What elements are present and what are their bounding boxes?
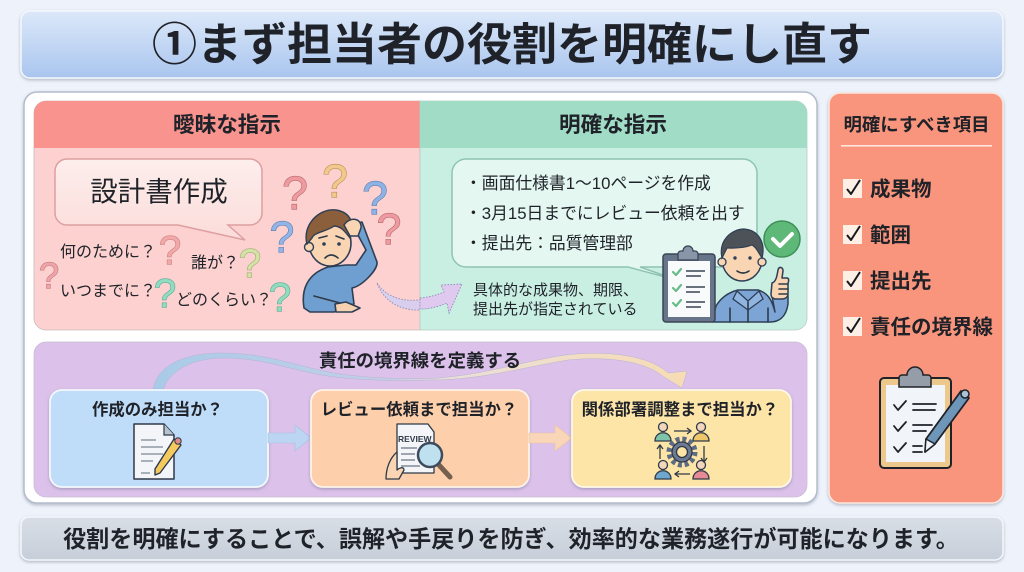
step 2: up to review request: レビュー依頼まで担当か？ (321, 400, 517, 419)
heading: items: 明確にすべき項目 (843, 114, 990, 135)
question mark decorations: ? (154, 272, 176, 316)
question mark decorations: ? (239, 242, 261, 286)
step 3: up to interdepartmental coordination (572, 390, 791, 487)
icon: clipboard and pen (880, 367, 969, 468)
summary bar (21, 517, 1003, 560)
speech bubble: specific instruction: ・提出先：品質管理部 (465, 234, 633, 253)
summary bar: 役割を明確にすることで、誤解や手戻りを防ぎ、効率的な業務遂行が可能になります。 (63, 526, 959, 552)
question mark decorations: ? (39, 255, 59, 296)
questions list: 誰が？ (191, 254, 239, 272)
speech bubble: specific instruction: ・3月15日までにレビュー依頼を出す (465, 204, 745, 223)
description text (473, 282, 638, 318)
icon: confused person (303, 210, 377, 312)
panel: responsibility boundary (34, 342, 807, 497)
question mark decorations: ? (377, 205, 401, 254)
checklist items (843, 177, 993, 339)
title bar (21, 11, 1003, 78)
icon: team and gear (655, 422, 709, 479)
question mark decorations: ? (159, 229, 181, 273)
description text: 提出先が指定されている (473, 301, 638, 318)
questions list: 何のために？ (60, 243, 156, 261)
checklist items: 成果物 (870, 177, 932, 201)
title bar: ①まず担当者の役割を明確にし直す (152, 19, 872, 70)
flow curve arrow (153, 353, 687, 390)
arrow: step 2 to 3 (529, 425, 572, 451)
icon: review document with magnifier: REVIEW (398, 434, 433, 444)
icon: confident person with clipboard (663, 221, 800, 322)
heading: boundary: 責任の境界線を定義する (319, 350, 521, 371)
questions list (60, 243, 272, 309)
question mark decorations: ? (270, 213, 294, 262)
checklist items: 責任の境界線 (870, 316, 993, 339)
heading: vague: 曖昧な指示 (173, 112, 281, 137)
icon: checklist clipboard (663, 246, 715, 322)
panel: items to clarify (829, 93, 1003, 503)
panel: clear instructions (420, 101, 807, 330)
question mark decorations (39, 155, 401, 320)
step 3: up to interdepartmental coordination: 関係部署調整まで担当か？ (582, 401, 778, 419)
icon: review document with magnifier (386, 424, 450, 479)
questions list: いつまでに？ (60, 283, 156, 300)
question mark decorations: ? (362, 172, 388, 224)
step 2: up to review request (311, 390, 529, 487)
arrow: step 1 to 2 (268, 425, 311, 451)
step 1: creation only (50, 390, 268, 487)
checklist items: 提出先 (870, 270, 932, 293)
description text: 具体的な成果物、期限、 (473, 282, 638, 299)
heading: clear: 明確な指示 (559, 112, 667, 137)
speech bubble: specific instruction: ・画面仕様書1〜10ページを作成 (465, 174, 711, 193)
questions list: どのくらい？ (176, 291, 272, 309)
arrow: vague to clear (377, 283, 462, 313)
icon: green check badge (764, 221, 800, 257)
speech bubble: specific instruction (452, 159, 757, 281)
question mark decorations: ? (269, 276, 291, 320)
main panel (24, 92, 817, 503)
question mark decorations: ? (322, 155, 348, 207)
checklist items: 範囲 (870, 224, 911, 247)
arrow head over green panel (420, 284, 462, 313)
question mark decorations: ? (282, 167, 308, 219)
step 1: creation only: 作成のみ担当か？ (92, 400, 223, 419)
panel: vague instructions (34, 101, 462, 330)
icon: document and pencil (134, 424, 181, 479)
speech bubble: design document: 設計書作成 (90, 176, 228, 207)
speech bubble: design document (55, 159, 262, 240)
